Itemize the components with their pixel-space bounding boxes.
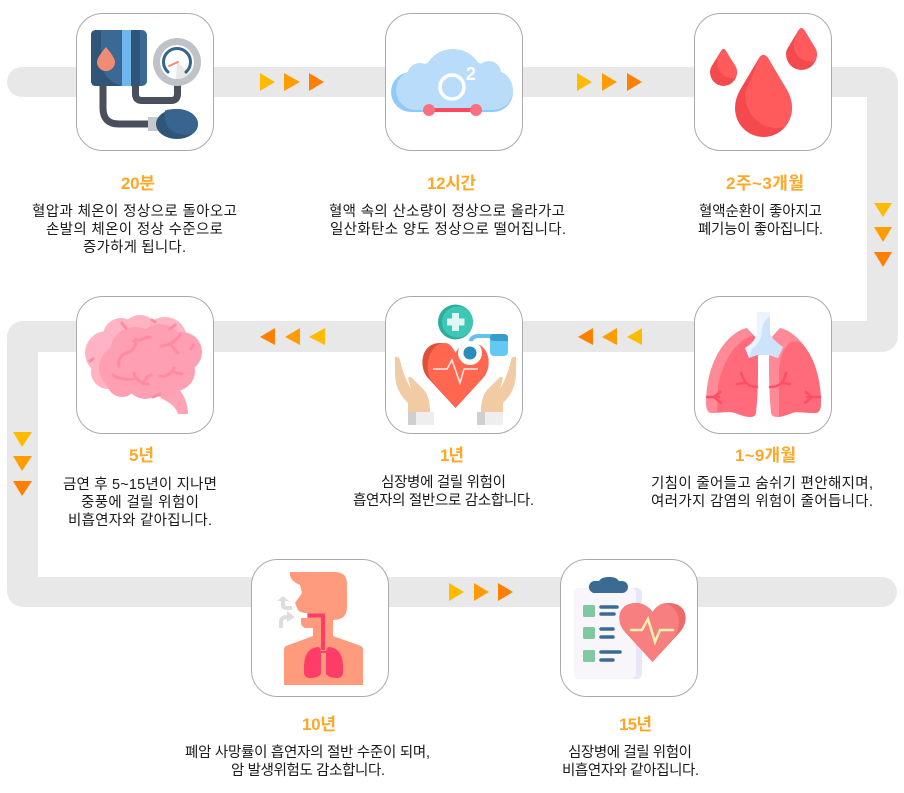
text block: 손발의 체온이 정상 수준으로 — [46, 221, 223, 238]
text block — [32, 203, 237, 256]
arrows: row 2 right set — [578, 328, 642, 345]
text block: 심장병에 걸릴 위험이 — [568, 744, 692, 761]
text block: 폐암 사망률이 흡연자의 절반 수준이 되며, — [185, 744, 430, 761]
text block: 여러가지 감염의 위험이 줄어듭니다. — [651, 493, 873, 510]
icon: clipboard and heart — [574, 577, 686, 679]
icon: respiratory system — [277, 572, 363, 685]
panel: 5년 — [63, 296, 217, 529]
text block — [329, 203, 566, 238]
text block — [698, 203, 823, 238]
arrows: left side downward — [13, 432, 32, 496]
arrows: row 3 — [449, 583, 513, 601]
text block: 흡연자의 절반으로 감소합니다. — [353, 492, 534, 509]
heading: 1년 — [440, 446, 464, 465]
text block: 중풍에 걸릴 위험이 — [81, 494, 199, 511]
icon: oxygen cloud: 2 — [466, 64, 476, 84]
arrows: row 1 first set — [260, 73, 324, 91]
heading: 5년 — [129, 446, 154, 465]
heading: 20분 — [121, 174, 155, 193]
icon: lungs — [706, 312, 821, 417]
text block: 혈액순환이 좋아지고 — [699, 203, 822, 220]
panel: 15년 — [560, 560, 699, 779]
heading: 10년 — [302, 715, 336, 734]
heading: 12시간 — [427, 174, 476, 193]
text block — [562, 744, 699, 779]
text block — [63, 476, 217, 529]
arrows: right side downward — [874, 203, 892, 267]
text block — [353, 474, 534, 509]
text block — [651, 475, 873, 510]
text block: 금연 후 5~15년이 지나면 — [63, 476, 217, 493]
text block: 기침이 줄어들고 숨쉬기 편안해지며, — [651, 475, 873, 492]
panel: 2주~3개월 — [694, 14, 832, 238]
icon: blood pressure monitor — [91, 30, 201, 139]
text block: 비흡연자와 같아집니다. — [562, 762, 699, 779]
panel: 20분 — [32, 14, 237, 256]
text block: 증가하게 됩니다. — [83, 239, 186, 256]
text block: 심장병에 걸릴 위험이 — [381, 474, 506, 491]
panel: 10년 — [185, 560, 430, 779]
text block: 폐기능이 좋아집니다. — [698, 221, 823, 238]
text block: 일산화탄소 양도 정상으로 떨어집니다. — [330, 221, 566, 238]
text block: 암 발생위험도 감소합니다. — [231, 762, 385, 779]
text block: 혈액 속의 산소량이 정상으로 올라가고 — [329, 203, 565, 220]
text block: 비흡연자와 같아집니다. — [68, 512, 212, 529]
arrows: row 1 second set — [577, 73, 642, 91]
heading: 2주~3개월 — [726, 174, 804, 193]
heading: 15년 — [619, 715, 652, 734]
timeline track — [7, 67, 898, 607]
text block — [185, 744, 430, 779]
panel: 1년 — [353, 296, 534, 509]
icon: heart and caring hands — [395, 304, 516, 425]
panel: 12시간 — [329, 14, 566, 238]
icon: blood drops — [710, 28, 817, 137]
icon: oxygen cloud — [391, 49, 513, 116]
panel: 1~9개월 — [651, 296, 873, 510]
text block: 혈압과 체온이 정상으로 돌아오고 — [32, 203, 237, 220]
arrows: row 2 left set — [260, 328, 325, 345]
icon: brain — [85, 315, 202, 414]
heading: 1~9개월 — [735, 446, 796, 465]
